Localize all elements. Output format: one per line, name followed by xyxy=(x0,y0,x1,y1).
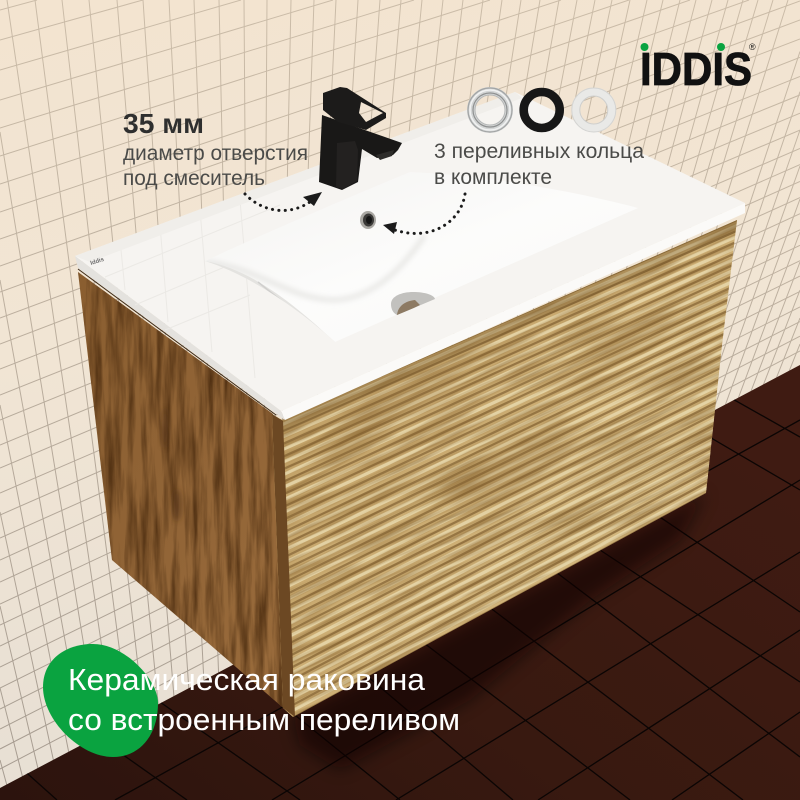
drain xyxy=(391,292,435,315)
overflow rings xyxy=(468,88,616,132)
ceramic sink xyxy=(75,92,745,420)
back ledge of countertop xyxy=(75,92,522,262)
caption xyxy=(68,662,460,737)
cabinet: side panel xyxy=(78,272,283,708)
floor: dark brown tile xyxy=(0,358,800,800)
rings text second line: в комплекте xyxy=(434,166,552,189)
basin shading xyxy=(205,235,425,345)
registered mark: ® xyxy=(749,42,756,52)
callout heading: 35 мм xyxy=(123,108,204,139)
tile reflection on countertop xyxy=(105,200,300,378)
front edge of countertop xyxy=(281,203,745,420)
small logo on countertop: Iddis xyxy=(90,257,106,267)
rings text: 3 переливных кольца xyxy=(434,140,644,163)
white ring xyxy=(572,88,616,132)
callout text second line: под смеситель xyxy=(123,167,265,190)
side edge of countertop xyxy=(75,256,285,420)
callout text: диаметр отверстия xyxy=(123,142,308,165)
faucet xyxy=(319,87,402,190)
green blob xyxy=(43,644,158,757)
overflow hole xyxy=(360,211,376,229)
faucet body highlight xyxy=(336,141,358,189)
callout: rings xyxy=(434,140,644,189)
logo green dots xyxy=(640,43,725,51)
arrow: to faucet hole xyxy=(245,192,322,210)
gap line under countertop xyxy=(78,269,276,415)
caption line one: Керамическая раковина xyxy=(68,662,426,697)
logo: IDDIS xyxy=(640,42,756,95)
logo wordmark: IDDIS xyxy=(640,43,752,95)
faucet handle xyxy=(323,87,386,130)
basin xyxy=(205,172,638,342)
spout aerator xyxy=(376,150,394,160)
caption line two: со встроенным переливом xyxy=(68,702,460,737)
countertop surface xyxy=(75,92,745,411)
cabinet: ribbed front panel xyxy=(272,220,737,717)
arrow: to overflow hole xyxy=(383,194,465,234)
callout: hole diameter xyxy=(123,108,308,190)
black ring xyxy=(524,92,560,128)
chrome ring xyxy=(468,88,512,132)
faucet body and spout xyxy=(319,115,402,190)
